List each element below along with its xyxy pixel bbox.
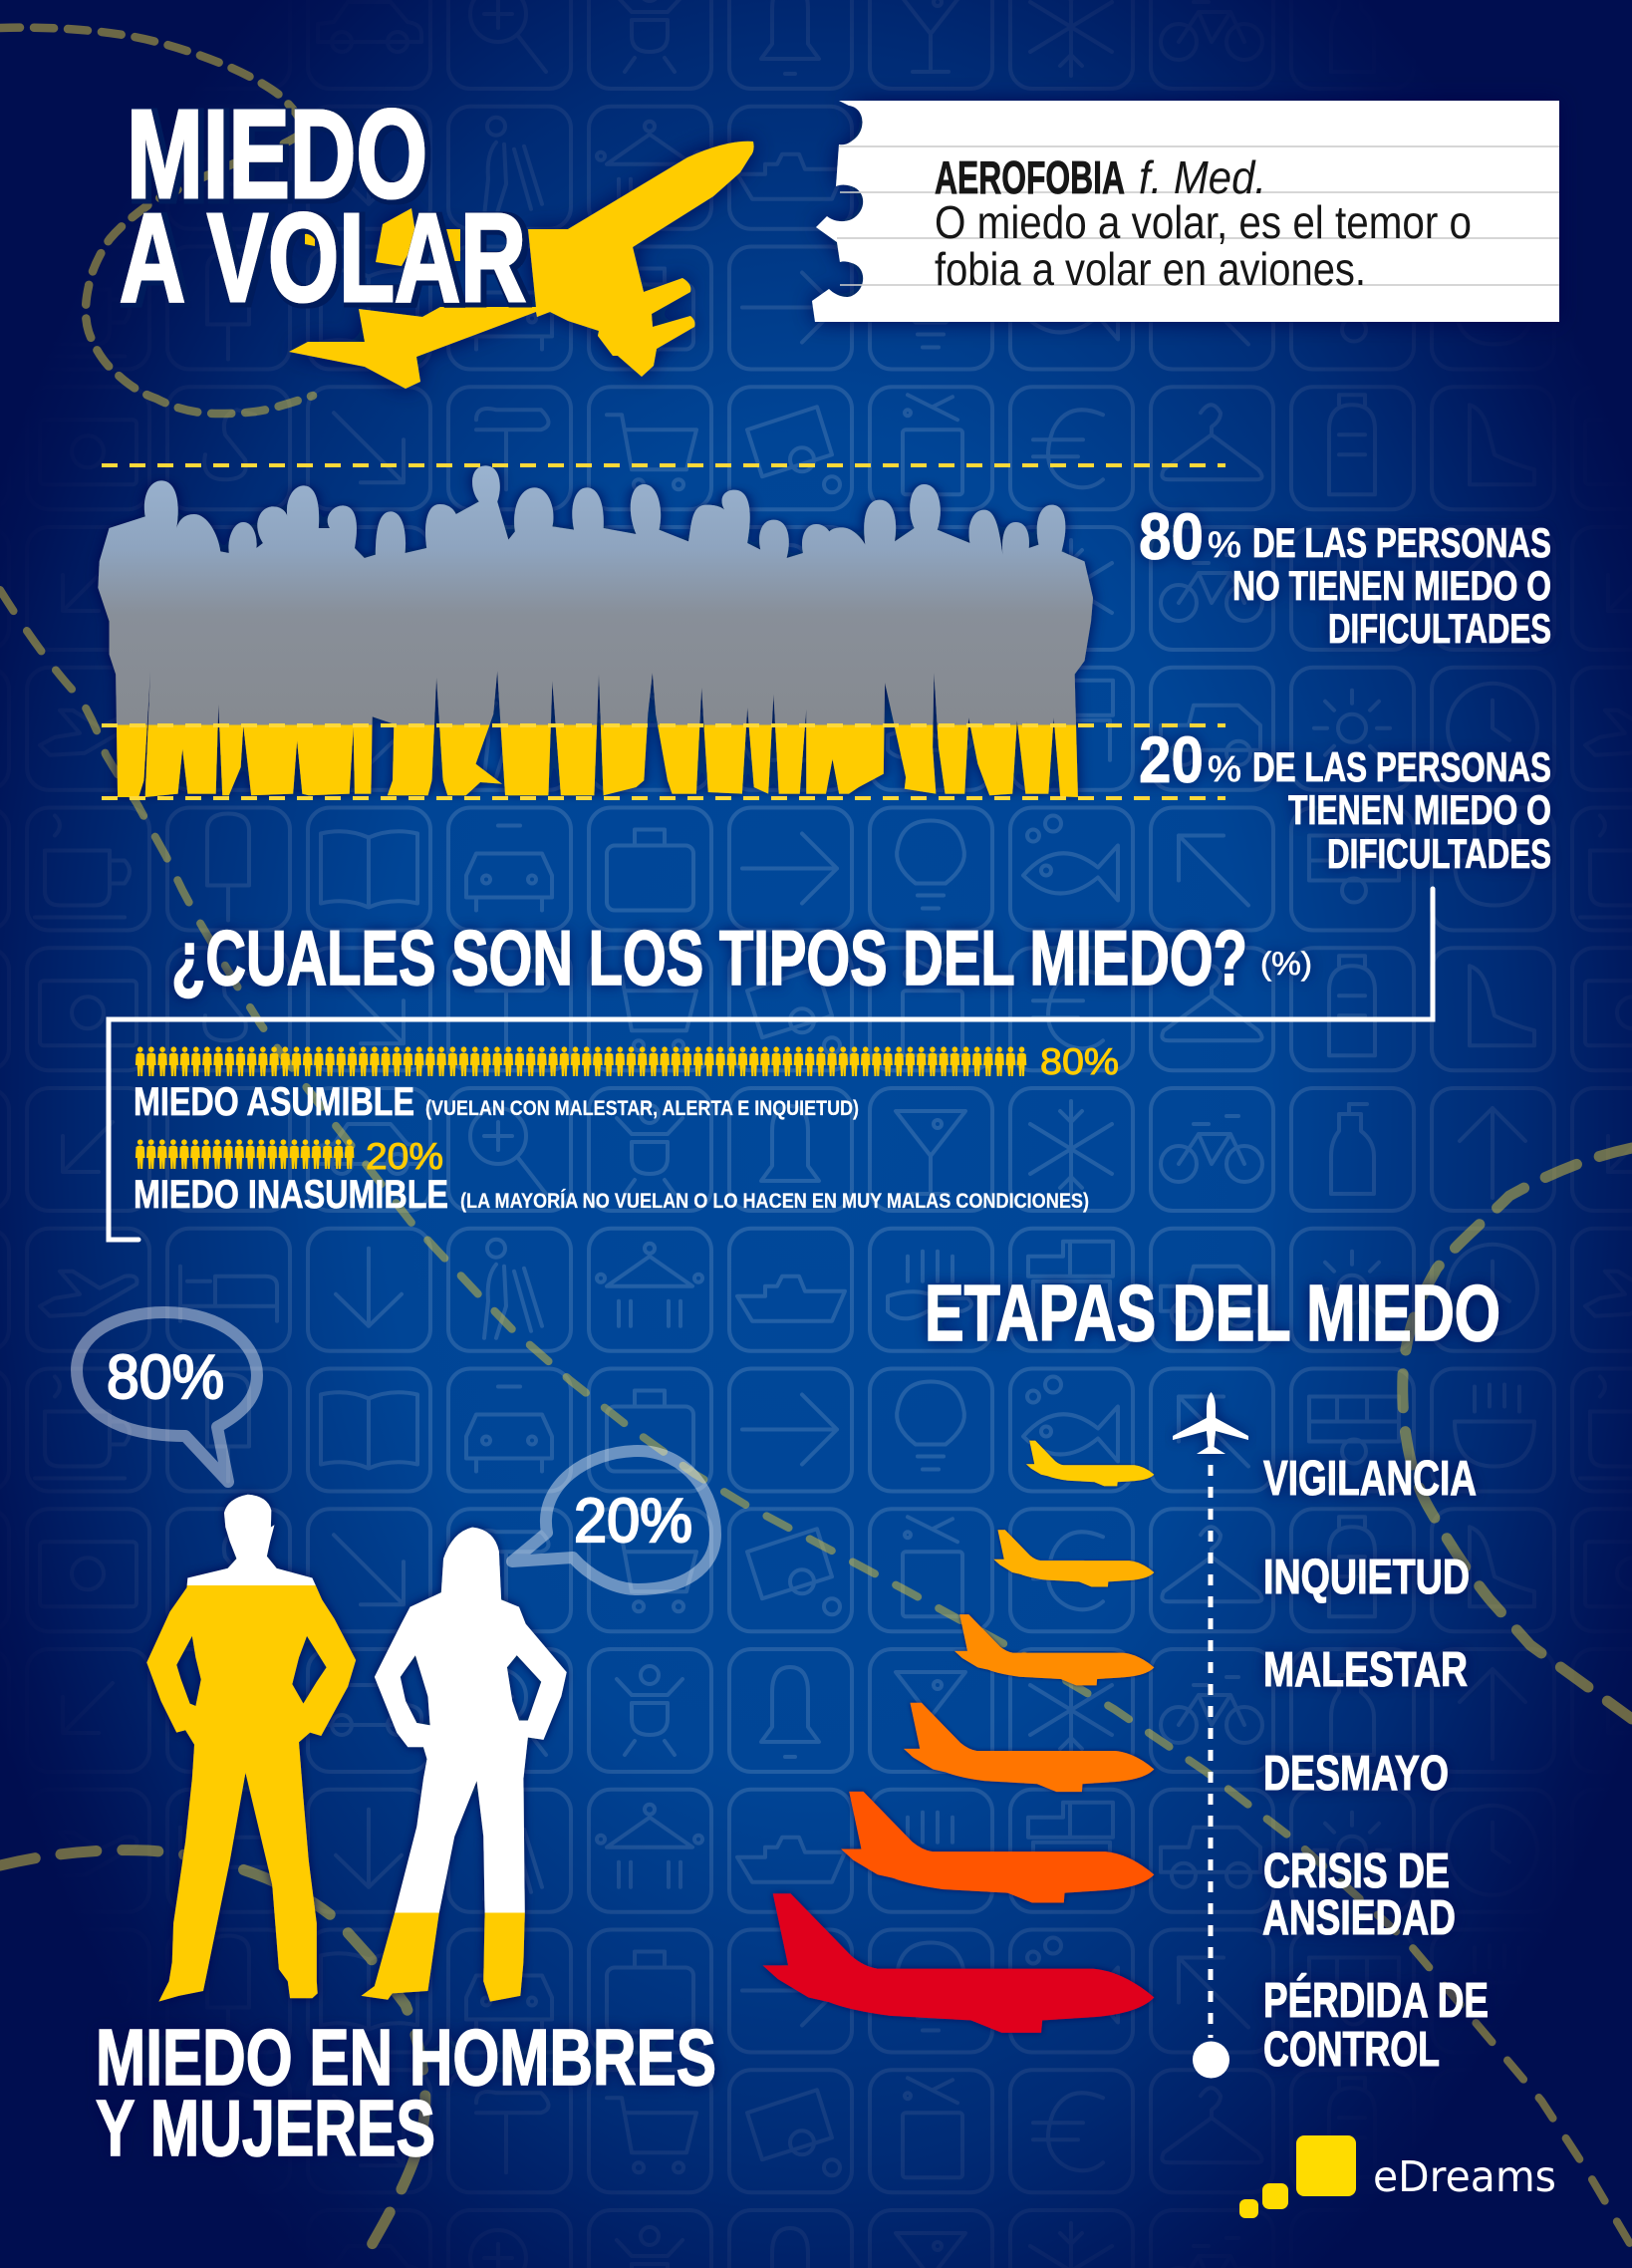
definition text: f. Med. [1139, 151, 1266, 203]
big yellow plane [289, 142, 754, 389]
stage labels [1262, 1452, 1489, 2077]
panel: definition note [812, 101, 1559, 322]
text block: 80% no fear: % [1208, 524, 1241, 565]
stage labels: INQUIETUD [1263, 1551, 1470, 1604]
speech bubble 80%: 80% [107, 1343, 224, 1412]
text block: 80% no fear: DIFICULTADES [1328, 605, 1551, 652]
plane: desmayo [904, 1703, 1154, 1792]
definition text: O miedo a volar, es el temor o [935, 196, 1472, 248]
plane: vigilancia [1026, 1441, 1154, 1486]
definition text: AEROFOBIA [935, 151, 1125, 203]
crowd chart: 80 / 20 silhouettes [98, 465, 1225, 798]
label: miedo inasumible: MIEDO INASUMIBLE [134, 1173, 448, 1217]
pictogram bar 20%: 20% [366, 1136, 443, 1177]
speech bubble 20% [512, 1451, 715, 1589]
label: miedo inasumible [134, 1173, 1089, 1217]
label: miedo asumible: MIEDO ASUMIBLE [134, 1080, 414, 1124]
stage planes [763, 1441, 1154, 2033]
pictogram bar 80%: 80% [1040, 1041, 1119, 1082]
definition text: fobia a volar en aviones. [935, 243, 1366, 295]
speech bubble 80% [77, 1312, 257, 1482]
text block: 20% fear: % [1208, 748, 1241, 789]
title [120, 84, 526, 328]
heading: miedo en hombres y mujeres: Y MUJERES [96, 2084, 435, 2172]
plane: malestar [954, 1614, 1154, 1685]
stage labels: DESMAYO [1263, 1747, 1449, 1801]
label: miedo inasumible: (LA MAYORÍA NO VUELAN O LO HACEN EN MUY MALAS CONDICIONES) [460, 1190, 1089, 1213]
pictogram bar 20% [136, 1136, 443, 1177]
stage labels: CRISIS DE [1263, 1844, 1450, 1898]
bracket frame [109, 889, 1433, 1240]
stage labels: ANSIEDAD [1262, 1891, 1456, 1945]
woman silhouette [361, 1528, 567, 2002]
text block: 80% no fear: 80 [1139, 499, 1204, 573]
flight path: right arc [1403, 1148, 1632, 1719]
plane: inquietud [993, 1530, 1154, 1586]
logo: eDreams [1239, 2135, 1556, 2218]
speech bubble 20%: 20% [574, 1487, 692, 1556]
plane: crisis de ansiedad [841, 1792, 1154, 1903]
flight path: long diagonal [0, 590, 1632, 2247]
label: miedo asumible [134, 1080, 859, 1124]
heading: tipos del miedo: ¿CUALES SON LOS TIPOS DEL MIEDO? [171, 914, 1247, 1001]
stage labels: VIGILANCIA [1263, 1452, 1477, 1506]
man silhouette [146, 1495, 356, 2002]
end dot [1193, 2041, 1229, 2079]
icon: white plane [1173, 1392, 1248, 1454]
logo: eDreams: eDreams [1373, 2152, 1556, 2202]
definition text [935, 151, 1472, 295]
label: miedo asumible: (VUELAN CON MALESTAR, ALERTA E INQUIETUD) [425, 1097, 859, 1120]
stage labels: MALESTAR [1263, 1643, 1468, 1697]
pictogram bar 80% [136, 1041, 1119, 1082]
stage labels: CONTROL [1263, 2023, 1440, 2077]
timeline: dashed line with plane and dot [1173, 1392, 1248, 2079]
stage labels: PÉRDIDA DE [1263, 1974, 1489, 2028]
bar chart: fear types [134, 1041, 1119, 1217]
flight path: top-left loop [0, 28, 313, 414]
heading: tipos del miedo: (%) [1260, 946, 1312, 982]
text block: 20% fear [1139, 722, 1551, 877]
text block: 20% fear: 20 [1139, 722, 1204, 796]
text block: 20% fear: DIFICULTADES [1327, 830, 1551, 877]
flight path: bottom-left [0, 1850, 425, 2262]
heading: miedo en hombres y mujeres: MIEDO EN HOMBRES [96, 2013, 716, 2102]
title: A VOLAR [120, 187, 526, 328]
heading: miedo en hombres y mujeres [96, 2013, 716, 2172]
title: MIEDO [127, 84, 427, 224]
text block: 80% no fear [1139, 499, 1551, 652]
text block: 20% fear: TIENEN MIEDO O [1288, 786, 1551, 833]
plane: pérdida de control [763, 1893, 1154, 2033]
